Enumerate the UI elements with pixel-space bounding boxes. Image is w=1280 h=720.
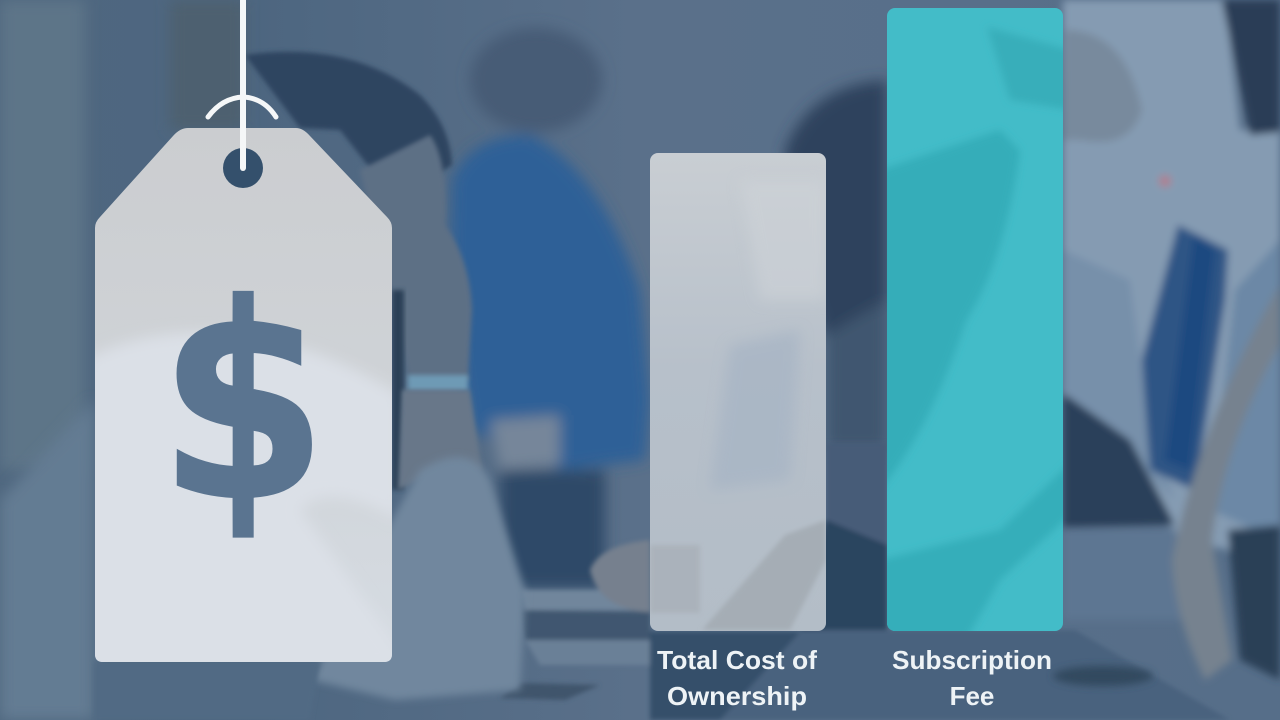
- tag body: [95, 128, 392, 662]
- tag lower sheen: [85, 333, 400, 670]
- woman sleeve: [312, 457, 525, 700]
- person at back: [450, 28, 650, 588]
- bar shading: [880, 27, 1070, 640]
- woman face and hand: [360, 135, 472, 380]
- label: fee: Fee: [950, 681, 994, 711]
- woman forearm: [398, 390, 482, 490]
- icon: dollar sign: $: [158, 247, 328, 561]
- panel: price tag: [85, 0, 400, 670]
- bar: total cost of ownership: [650, 153, 826, 631]
- bar: subscription fee: [880, 8, 1070, 640]
- string loop: [208, 97, 276, 117]
- label: total cost of ownership: Total Cost of: [657, 645, 817, 675]
- bar reflections: [650, 249, 826, 630]
- foreground woman: [0, 52, 525, 720]
- label: subscription: Subscription: [892, 645, 1052, 675]
- string: [240, 0, 246, 168]
- label: ownership: Ownership: [667, 681, 807, 711]
- tag eyelet: [223, 148, 263, 188]
- woman hair: [245, 52, 452, 200]
- laptop and desk: [500, 443, 1230, 720]
- woman wrist band: [408, 375, 468, 391]
- right-hand person: [1053, 0, 1280, 686]
- person at centre: [785, 80, 887, 450]
